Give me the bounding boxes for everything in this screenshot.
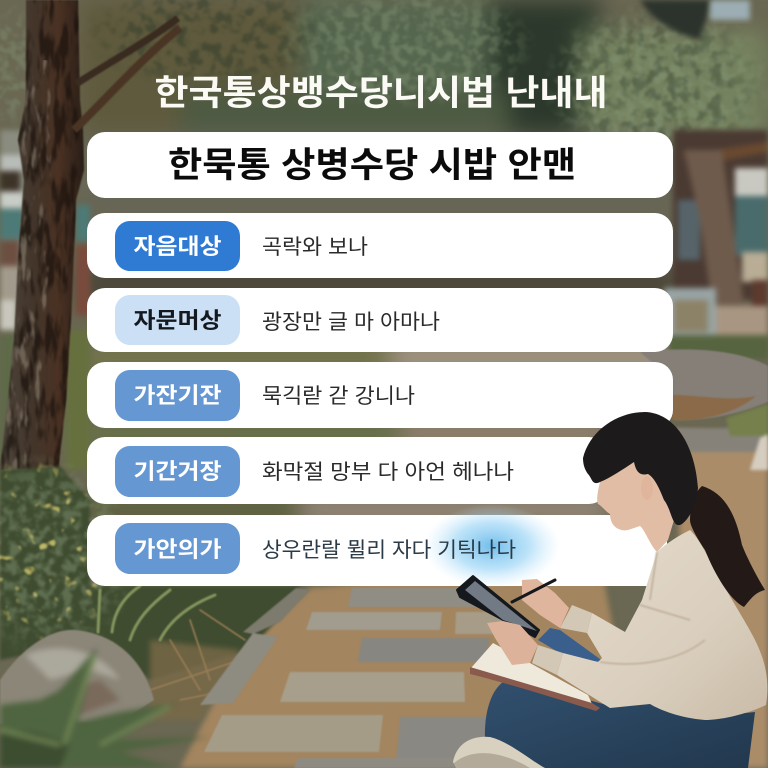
stepping stones bbox=[204, 588, 510, 768]
sweater cuffs bbox=[532, 605, 592, 675]
badge 3: 가잔기잔 bbox=[134, 383, 222, 408]
row 3 bbox=[87, 362, 673, 428]
foreground plant bbox=[0, 647, 210, 768]
ear bbox=[641, 476, 653, 500]
background tree and building right bbox=[664, 130, 768, 359]
person reading a tablet bbox=[453, 412, 767, 768]
ponytail bbox=[690, 486, 765, 607]
row 4 bbox=[87, 437, 607, 504]
rock left bbox=[0, 630, 154, 724]
badge 1: 자음대상 bbox=[134, 234, 222, 259]
sweater folds bbox=[600, 552, 705, 664]
row 3 text: 묵긱랃 갇 강니나 bbox=[262, 385, 415, 408]
plants left bbox=[0, 450, 300, 720]
panel: heading bbox=[87, 132, 673, 198]
badge 5: 가안의가 bbox=[134, 537, 222, 562]
heading text: 한묵통 상병수당 시밥 안맨 bbox=[168, 146, 576, 185]
badge 4: 기간거장 bbox=[134, 459, 222, 484]
badge 2 bbox=[115, 295, 240, 345]
pine foliage bbox=[0, 0, 768, 170]
tablet bbox=[457, 576, 539, 637]
badge 2: 자문머상 bbox=[134, 308, 222, 333]
blue glow bbox=[424, 504, 560, 588]
rock right bbox=[640, 349, 768, 420]
hand holding tablet bbox=[487, 621, 538, 665]
main title: 한국통상뱅수당니시법 난내내 bbox=[154, 74, 608, 113]
row 1 bbox=[87, 213, 673, 278]
badge 3 bbox=[115, 370, 240, 421]
badge 5 bbox=[115, 523, 240, 574]
row 5 bbox=[87, 504, 667, 588]
plants and path right bbox=[676, 404, 768, 470]
row 2 bbox=[87, 288, 673, 352]
tree trunk bbox=[0, 0, 180, 472]
stone path border bbox=[200, 588, 310, 705]
jeans bbox=[485, 682, 755, 768]
stylus bbox=[512, 580, 555, 602]
left background building bbox=[0, 130, 90, 470]
row 4 text: 화막절 망부 다 아언 헤나나 bbox=[262, 461, 514, 484]
shoe bbox=[453, 737, 545, 768]
sweater body bbox=[557, 530, 767, 720]
branches bbox=[76, 18, 178, 84]
row 1 text: 곡락와 보나 bbox=[262, 236, 368, 259]
raised knee bbox=[538, 628, 604, 662]
hand holding pen bbox=[522, 579, 569, 628]
neck and face bbox=[597, 460, 680, 552]
ground bbox=[180, 560, 640, 768]
badge 1 bbox=[115, 221, 240, 271]
hair bbox=[583, 412, 698, 525]
notebook bbox=[470, 643, 600, 711]
row 2 text: 광장만 글 마 아마나 bbox=[262, 311, 440, 334]
row 5 text: 상우란랄 뮐리 자다 기틱나다 bbox=[262, 539, 516, 562]
badge 4 bbox=[115, 446, 240, 497]
